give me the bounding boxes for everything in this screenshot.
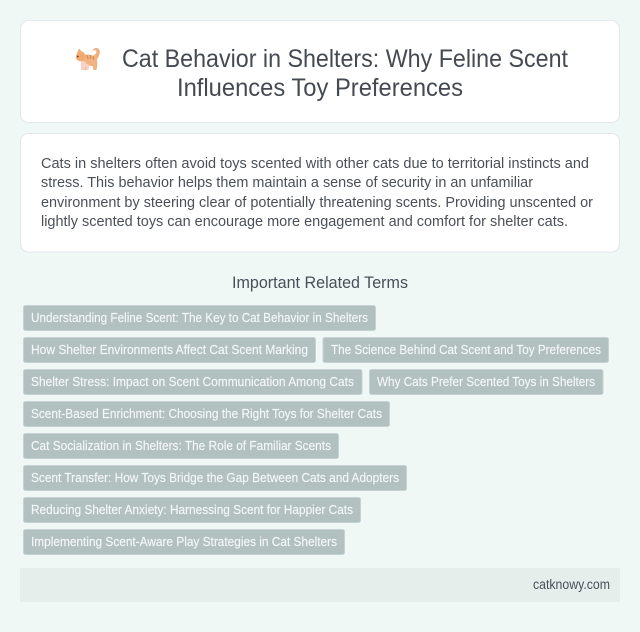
tag 2: How Shelter Environments Affect Cat Scent Marking	[31, 342, 308, 357]
footer	[20, 568, 620, 602]
tag 3	[323, 338, 608, 362]
tag 2	[24, 338, 316, 362]
tag 9	[24, 498, 360, 522]
tag 1	[24, 306, 376, 330]
tag 9: Reducing Shelter Anxiety: Harnessing Scent for Happier Cats	[31, 502, 353, 517]
tag 10	[24, 530, 344, 554]
tag 5: Why Cats Prefer Scented Toys in Shelters	[377, 374, 595, 389]
tag 5	[370, 370, 603, 394]
panel: summary text	[20, 134, 620, 252]
panel: summary text: Cats in shelters often avoid toys scented with other cats due to territorial instincts and	[41, 155, 589, 172]
tag 6	[24, 402, 390, 426]
term tags	[24, 306, 608, 554]
tag 7: Cat Socialization in Shelters: The Role of Familiar Scents	[31, 438, 331, 453]
panel: title header	[20, 20, 620, 122]
tag 10: Implementing Scent-Aware Play Strategies in Cat Shelters	[31, 534, 337, 549]
tag 7	[24, 434, 338, 458]
panel: summary text: stress. This behavior helps them maintain a sense of security in an unfamiliar	[41, 174, 533, 191]
heading: related terms: Important Related Terms	[232, 274, 408, 292]
tag 6: Scent-Based Enrichment: Choosing the Right Toys for Shelter Cats	[31, 406, 382, 421]
tag 4: Shelter Stress: Impact on Scent Communication Among Cats	[31, 374, 354, 389]
tag 8	[24, 466, 406, 490]
title: Cat Behavior in Shelters: Why Feline Scent	[122, 45, 568, 73]
panel: title header: Influences Toy Preferences	[177, 74, 463, 102]
icon: cat	[76, 48, 100, 70]
panel: summary text: environment by steering clear of potentially threatening scents. Providing unscented or	[41, 194, 593, 211]
panel: summary text: lightly scented toys can encourage more engagement and comfort for shelter cats.	[41, 213, 568, 230]
tag 1: Understanding Feline Scent: The Key to Cat Behavior in Shelters	[31, 310, 368, 325]
tag 4	[24, 370, 362, 394]
tag 3: The Science Behind Cat Scent and Toy Preferences	[331, 342, 601, 357]
footer: catknowy.com	[533, 577, 610, 592]
tag 8: Scent Transfer: How Toys Bridge the Gap Between Cats and Adopters	[31, 470, 399, 485]
